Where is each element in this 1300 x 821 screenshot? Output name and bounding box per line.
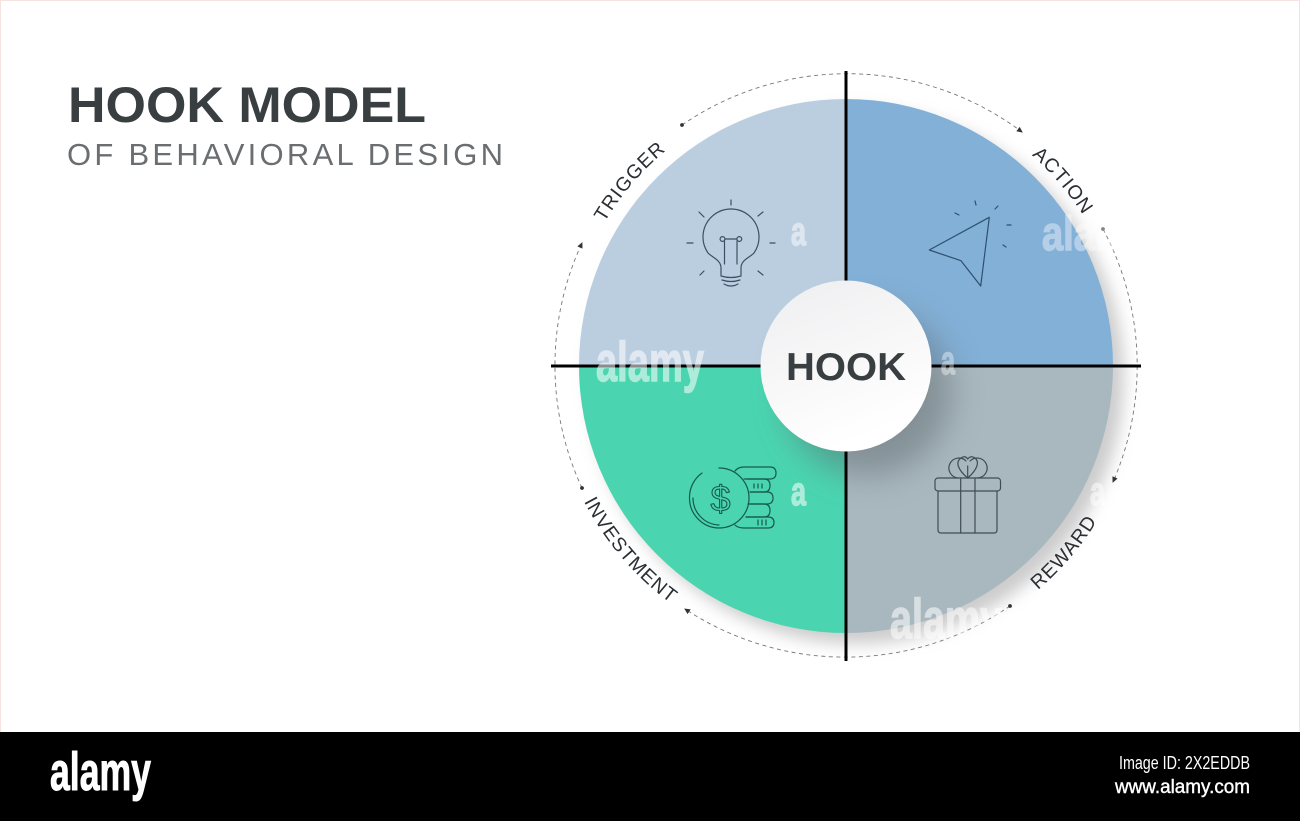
watermarks: a (791, 470, 807, 514)
icon: coins (689, 467, 776, 528)
panel: investment quadrant (579, 366, 846, 633)
subheading: of behavioral design: OF BEHAVIORAL DESIGN (67, 137, 503, 172)
panel: reward quadrant (846, 366, 1113, 633)
website: www.alamy.com (1114, 777, 1250, 798)
hook cycle diagram (551, 71, 1150, 661)
watermarks: alamy (1042, 208, 1150, 261)
panel: trigger quadrant (579, 99, 846, 366)
label: reward: REWARD (1030, 517, 1094, 589)
hub label: HOOK (786, 346, 906, 389)
label: action: ACTION (1032, 149, 1093, 214)
horizontal axis (551, 364, 1141, 368)
arrow: dashed arc to trigger (555, 243, 582, 488)
title (67, 77, 503, 172)
hub shadow (784, 308, 952, 476)
panel: hook hub (760, 280, 932, 452)
arrow: dashed arc to investment (685, 606, 1010, 657)
panel: action quadrant (846, 99, 1113, 366)
label: investment: INVESTMENT (584, 496, 678, 600)
arrow: dashed arc to reward (1103, 229, 1137, 482)
watermarks: a (941, 339, 955, 383)
icon: cursor arrow (929, 201, 1011, 286)
watermarks: a (791, 210, 807, 254)
vertical axis (844, 71, 848, 661)
watermarks (596, 208, 1150, 650)
arrow: dashed arc to action (682, 74, 1022, 132)
footer logo: alamy (50, 742, 151, 802)
watermarks: a (1090, 470, 1106, 514)
dollar sign: $ (710, 478, 731, 519)
watermarks: alamy (596, 330, 704, 393)
heading: hook model: HOOK MODEL (68, 77, 426, 133)
icon: light bulb (687, 200, 775, 286)
footer band (0, 732, 1300, 821)
watermarks: alamy (890, 587, 1002, 650)
disc shadow (590, 110, 1124, 644)
label: trigger: TRIGGER (593, 143, 665, 218)
icon: gift box (935, 457, 1000, 533)
image id: Image ID: 2X2EDDB (1119, 753, 1250, 773)
